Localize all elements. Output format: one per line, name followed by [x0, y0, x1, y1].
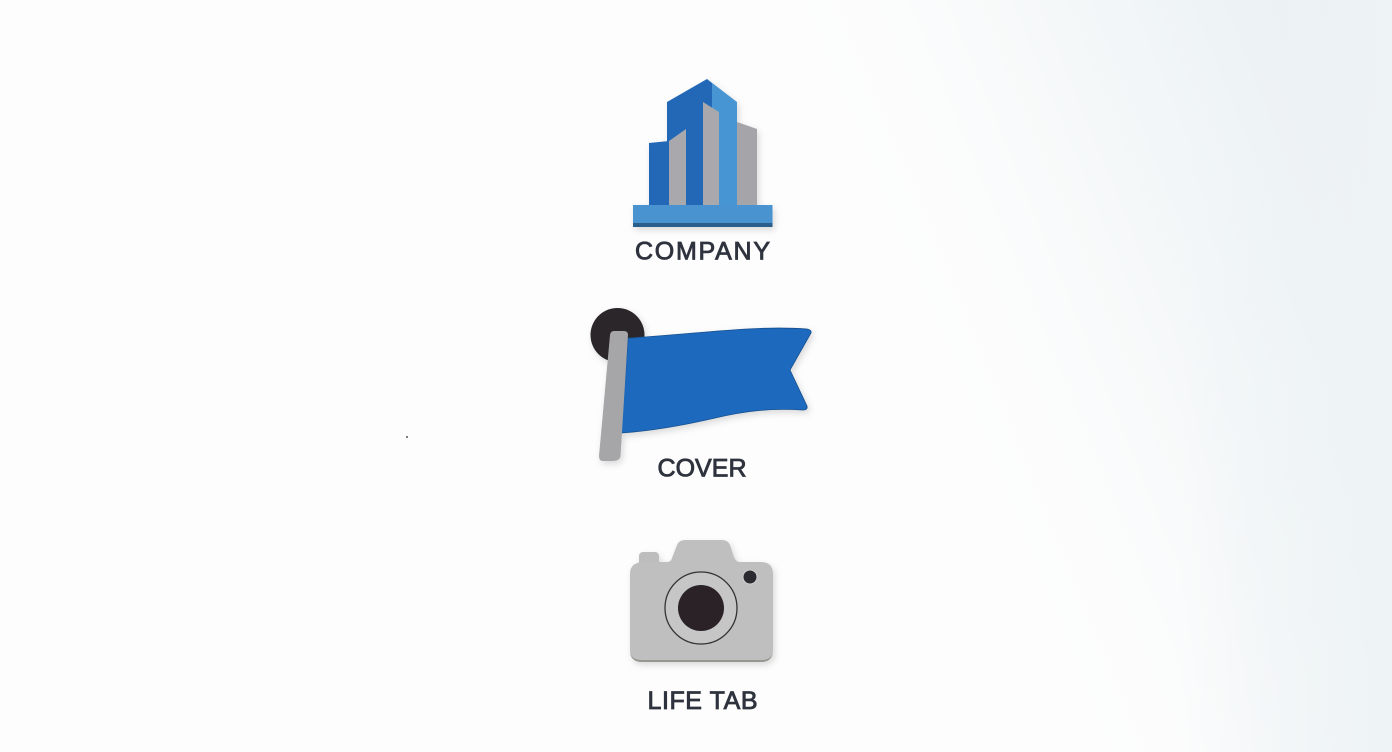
- label: cover: COVER: [658, 454, 746, 482]
- label: company: COMPANY: [635, 238, 770, 266]
- viewfinder dot: [743, 570, 757, 584]
- camera body: [630, 540, 773, 662]
- label: life tab: LIFE TAB: [648, 687, 758, 715]
- icon: life tab camera: [630, 540, 773, 662]
- icon: company building: [633, 79, 772, 227]
- lens: [665, 572, 737, 644]
- icon: cover flag: [590, 308, 811, 461]
